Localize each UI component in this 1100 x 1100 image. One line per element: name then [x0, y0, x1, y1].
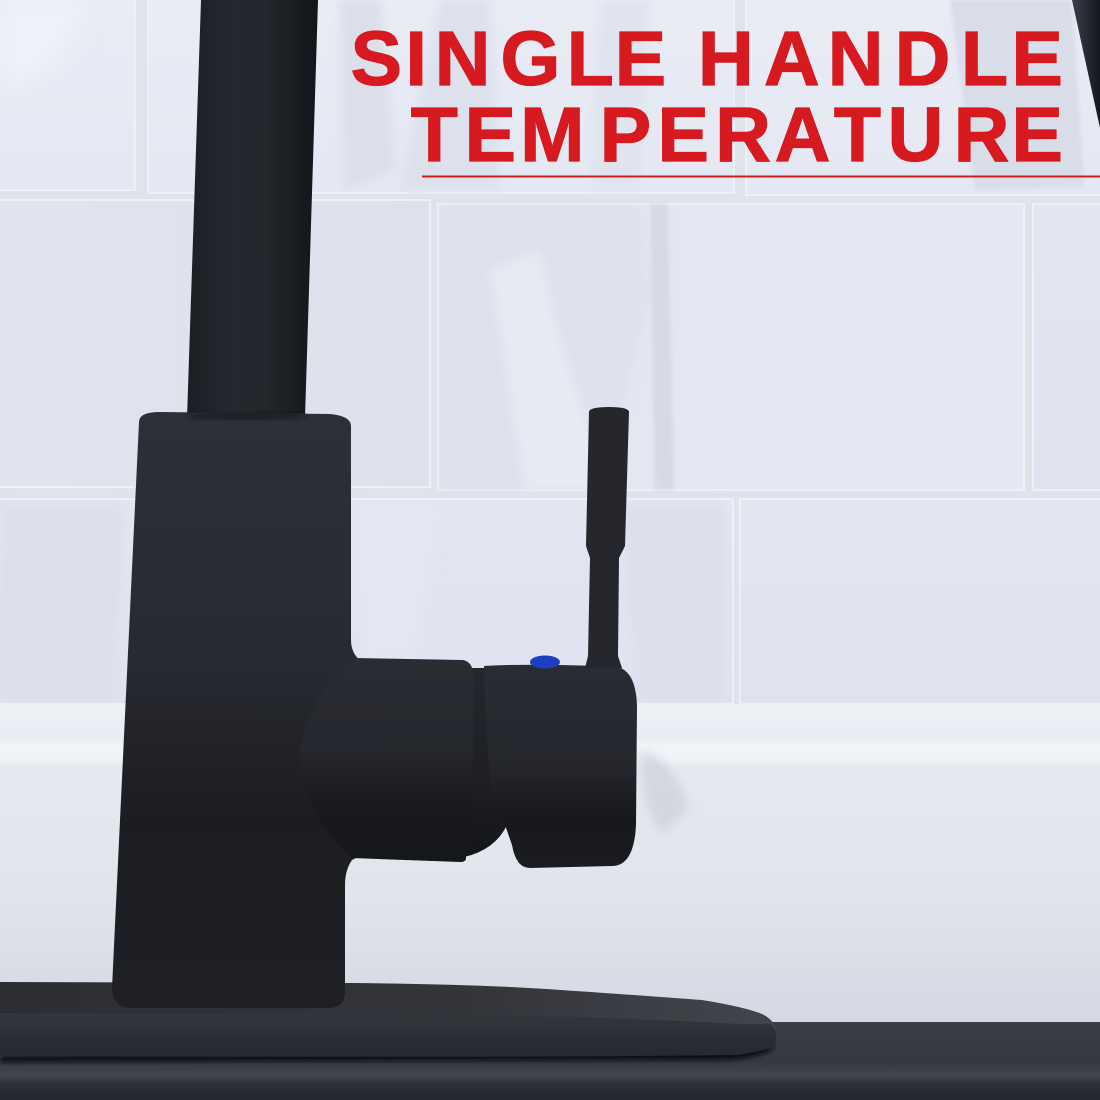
heading line 1: SINGLE HANDLE — [351, 16, 1063, 102]
handle connector — [464, 668, 507, 857]
spout tube — [187, 0, 318, 418]
blue temperature indicator — [530, 656, 560, 668]
wall tile background — [0, 0, 1100, 710]
deck plate — [0, 982, 776, 1062]
spout collar shadow — [186, 412, 306, 420]
top right dark edge — [1072, 0, 1100, 128]
heading underline — [422, 176, 1100, 178]
handle lever — [585, 407, 629, 668]
faucet — [0, 0, 776, 1062]
dark countertop — [0, 1022, 1100, 1100]
heading line 2: TEMPERATURE — [411, 92, 1063, 178]
neck cylinder — [300, 658, 474, 862]
faucet body — [112, 412, 362, 1008]
heading — [351, 16, 1063, 178]
handle cap — [484, 665, 637, 868]
tile reflections — [0, 0, 1084, 700]
marble ledge — [0, 704, 1100, 1024]
